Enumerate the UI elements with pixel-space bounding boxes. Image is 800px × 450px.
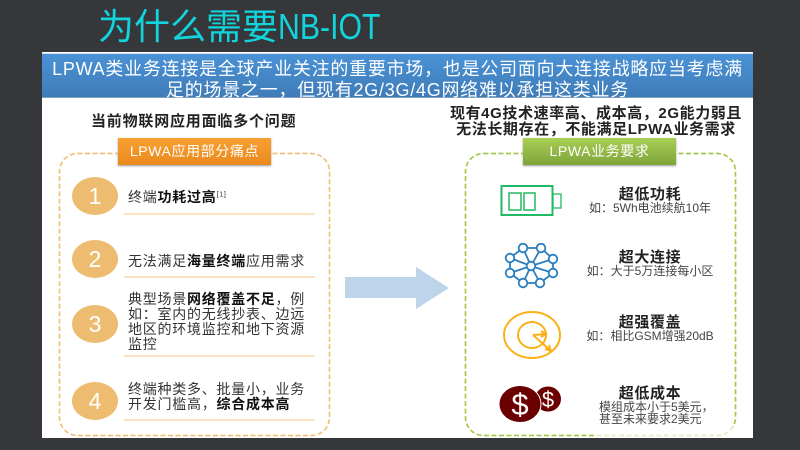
low power detail: 如：5Wh电池续航10年 <box>589 201 711 215</box>
text: coverage <box>586 314 714 343</box>
low cost detail: 甚至未来要求2美元 <box>599 412 702 426</box>
coverage detail: 如：相比GSM增强20dB <box>586 329 714 343</box>
icon: network <box>504 243 558 288</box>
icon: number 2: 2 <box>89 246 101 272</box>
item 4 text: 开发门槛高，综合成本高 <box>128 396 290 412</box>
blue banner: LPWA类业务连接是全球产业关注的重要市场，也是公司面向大连接战略应当考虑满 <box>52 59 743 79</box>
coverage title: 超强覆盖 <box>619 314 681 331</box>
right heading <box>450 105 742 138</box>
item 3 <box>72 291 305 352</box>
item 4 rule <box>124 419 315 421</box>
title <box>98 6 380 47</box>
item 4 text <box>128 381 305 412</box>
blue banner <box>42 53 753 98</box>
icon: coins: $ <box>542 387 554 412</box>
panel heading: pain points: LPWA应用部分痛点 <box>130 143 259 159</box>
low cost detail <box>599 400 714 426</box>
title: NB-IOT <box>278 6 380 47</box>
text: massive connections <box>587 249 713 278</box>
blue banner: 足的场景之一，但现有2G/3G/4G网络难以承担这类业务 <box>166 80 629 100</box>
icon: number 3 <box>72 305 118 343</box>
item 2 rule <box>124 276 315 278</box>
icon: number 1: 1 <box>89 183 101 209</box>
connections title: 超大连接 <box>619 249 681 266</box>
right heading: 现有4G技术速率高、成本高，2G能力弱且 <box>450 105 742 122</box>
panel heading: pain points <box>118 138 271 165</box>
arrow <box>345 267 449 309</box>
text: low power <box>589 186 711 215</box>
item 4 text: 终端种类多、批量小，业务 <box>128 381 305 397</box>
icon: coins: $ <box>511 387 529 422</box>
connections detail: 如：大于5万连接每小区 <box>587 264 713 278</box>
item 1 rule <box>124 213 315 215</box>
low power title: 超低功耗 <box>619 186 681 203</box>
low cost title: 超低成本 <box>619 385 681 402</box>
item 1 text: 终端功耗过高[1] <box>128 189 227 205</box>
item 3 text: 地区的环境监控和地下资源 <box>128 321 305 337</box>
panel: pain points <box>58 152 330 436</box>
icon: coins <box>500 386 561 422</box>
item 4 <box>72 381 305 420</box>
speckled smudge over panel edge <box>595 427 752 438</box>
text: low cost <box>599 385 714 426</box>
panel heading: requirements <box>523 138 676 165</box>
title: 为什么需要 <box>98 6 278 47</box>
icon: coverage <box>503 311 561 359</box>
item 3 text: 如：室内的无线抄表、边远 <box>128 306 305 322</box>
icon: number 1 <box>72 177 118 215</box>
item 3 text: 典型场景网络覆盖不足，例 <box>128 291 305 307</box>
left heading: 当前物联网应用面临多个问题 <box>91 113 296 130</box>
item 3 text <box>128 291 305 352</box>
right heading: 无法长期存在，不能满足LPWA业务需求 <box>456 121 736 138</box>
panel: requirements <box>464 152 736 436</box>
icon: battery <box>500 185 562 216</box>
item 2 <box>72 240 305 278</box>
item 3 text: 监控 <box>128 336 158 352</box>
item 1 <box>72 177 227 215</box>
icon: number 2 <box>72 240 118 278</box>
panel heading: requirements: LPWA业务要求 <box>550 143 649 159</box>
icon: number 4 <box>72 382 118 420</box>
item 3 rule <box>124 355 315 357</box>
icon: number 4: 4 <box>89 388 101 414</box>
low cost detail: 模组成本小于5美元， <box>599 400 714 414</box>
icon: number 3: 3 <box>89 311 101 337</box>
item 2 text: 无法满足海量终端应用需求 <box>128 253 305 269</box>
white content panel <box>42 52 753 438</box>
